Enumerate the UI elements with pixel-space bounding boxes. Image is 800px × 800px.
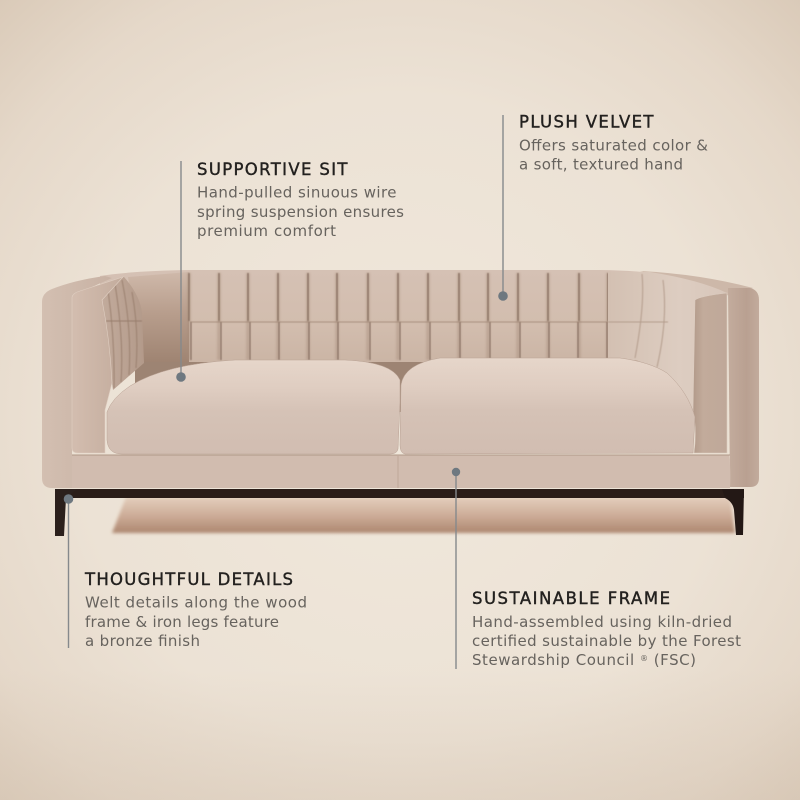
right inner arm — [608, 272, 727, 425]
leader line — [455, 472, 457, 669]
callout: supportive sit — [176, 160, 404, 382]
left arm front — [72, 277, 123, 453]
leader line — [502, 115, 504, 296]
body text: Offers saturated color & — [519, 136, 708, 154]
marker dot — [64, 494, 73, 504]
callout: supportive sit: spring suspension ensures — [197, 203, 404, 221]
heading: SUSTAINABLE FRAME — [472, 589, 670, 608]
right arm tufting — [608, 274, 668, 367]
sofa back — [100, 270, 725, 412]
back left shaded corner — [128, 272, 189, 362]
left outer arm — [42, 276, 112, 488]
base frame — [72, 455, 730, 488]
seat gap shading — [135, 362, 695, 412]
callout: sustainable frame — [452, 468, 741, 669]
right seat cushion — [400, 358, 695, 454]
right arm top — [640, 271, 753, 296]
left seat cushion — [107, 360, 400, 454]
callout: thoughtful details: frame & iron legs feature — [85, 613, 279, 631]
sofa — [42, 270, 759, 536]
heading: SUPPORTIVE SIT — [197, 160, 348, 179]
left arm tufted panel — [102, 277, 144, 390]
marker dot — [452, 468, 460, 476]
callout: sustainable frame: (FSC) — [648, 651, 696, 669]
callout: thoughtful details: a bronze finish — [85, 632, 200, 650]
body text: Welt details along the wood — [85, 594, 307, 612]
floor shadow — [112, 497, 735, 533]
callout: supportive sit: premium comfort — [197, 222, 336, 240]
left leg — [55, 489, 77, 536]
callout: plush velvet: a soft, textured hand — [519, 156, 683, 174]
back tufting — [189, 273, 620, 360]
body text: Hand-assembled using kiln-dried — [472, 613, 732, 631]
right leg — [722, 489, 744, 535]
heading: PLUSH VELVET — [519, 112, 654, 132]
right arm front — [693, 293, 727, 453]
marker dot — [498, 291, 508, 301]
bottom vignette — [0, 670, 800, 800]
right outer arm — [728, 288, 759, 487]
leader line — [68, 499, 70, 648]
metal rail — [56, 489, 744, 498]
callout: sustainable frame: ® — [640, 654, 648, 663]
body text: Hand-pulled sinuous wire — [197, 184, 396, 202]
callout: plush velvet — [498, 112, 708, 301]
leader line — [180, 161, 182, 377]
callout: thoughtful details — [64, 494, 307, 650]
heading: THOUGHTFUL DETAILS — [84, 570, 293, 589]
callout: sustainable frame: certified sustainable by the Forest — [472, 632, 741, 650]
marker dot — [176, 372, 186, 382]
callout: sustainable frame: Stewardship Council — [472, 651, 634, 669]
